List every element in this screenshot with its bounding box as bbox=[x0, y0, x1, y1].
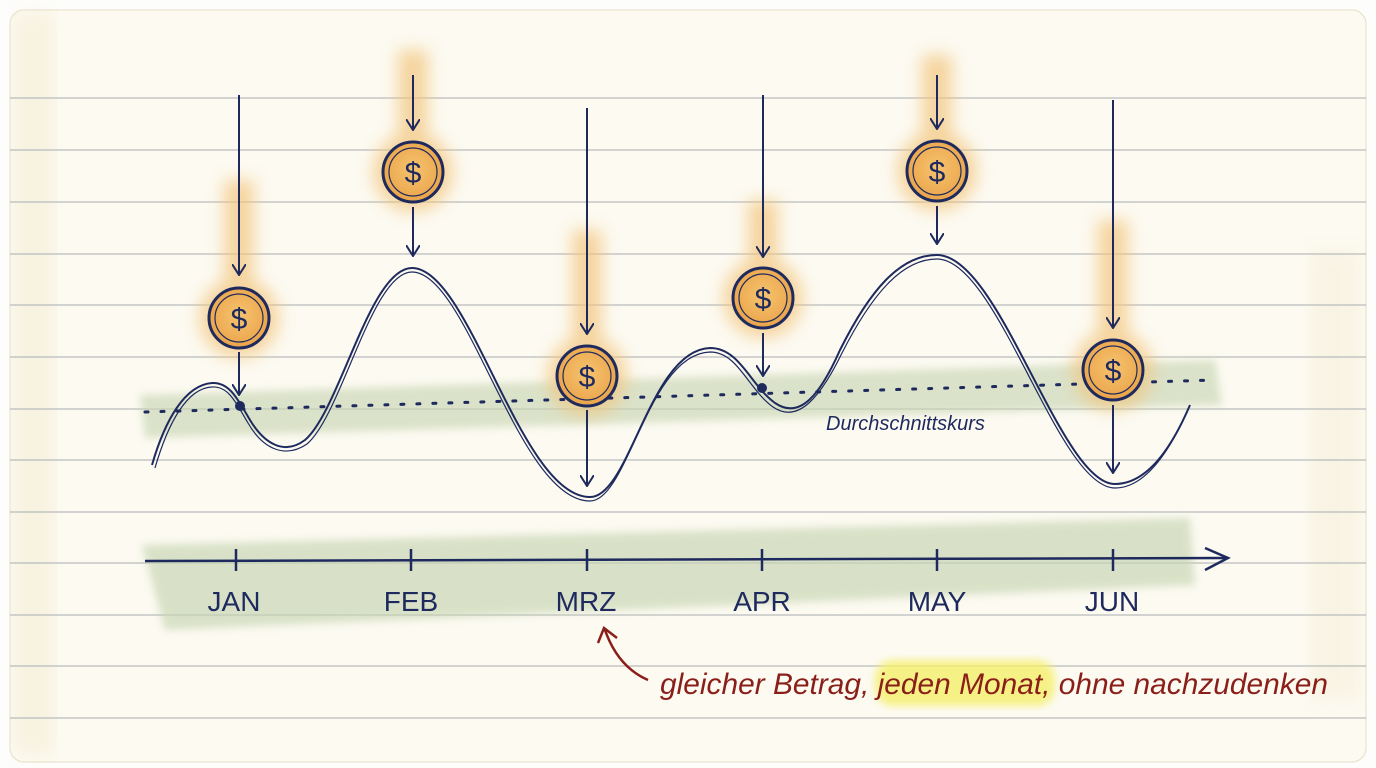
coins bbox=[209, 141, 1143, 406]
month labels: JUN bbox=[1085, 586, 1139, 617]
arrows bbox=[239, 75, 1113, 486]
average line (dotted) bbox=[145, 380, 1215, 412]
label: Durchschnittskurs: Durchschnittskurs bbox=[826, 413, 985, 435]
coins: $ bbox=[929, 156, 946, 189]
coins: $ bbox=[405, 157, 422, 190]
month labels bbox=[208, 586, 1139, 617]
orange glows bbox=[199, 50, 1153, 416]
annotation arrow bbox=[598, 628, 648, 680]
month labels: JAN bbox=[208, 586, 260, 617]
price curve bbox=[152, 255, 1190, 501]
coins: $ bbox=[579, 361, 596, 394]
month labels: MRZ bbox=[556, 586, 616, 617]
coins: $ bbox=[755, 283, 772, 316]
green band: average bbox=[140, 360, 1222, 438]
coins: $ bbox=[1105, 355, 1122, 388]
month labels: APR bbox=[733, 586, 791, 617]
time axis bbox=[145, 548, 1228, 571]
month labels: MAY bbox=[908, 586, 967, 617]
coins: $ bbox=[231, 303, 248, 336]
green band: axis bbox=[142, 518, 1195, 630]
month labels: FEB bbox=[384, 586, 438, 617]
annotation text: gleicher Betrag, jeden Monat, ohne nachzudenken bbox=[660, 668, 1328, 701]
highlight bbox=[875, 660, 1055, 706]
